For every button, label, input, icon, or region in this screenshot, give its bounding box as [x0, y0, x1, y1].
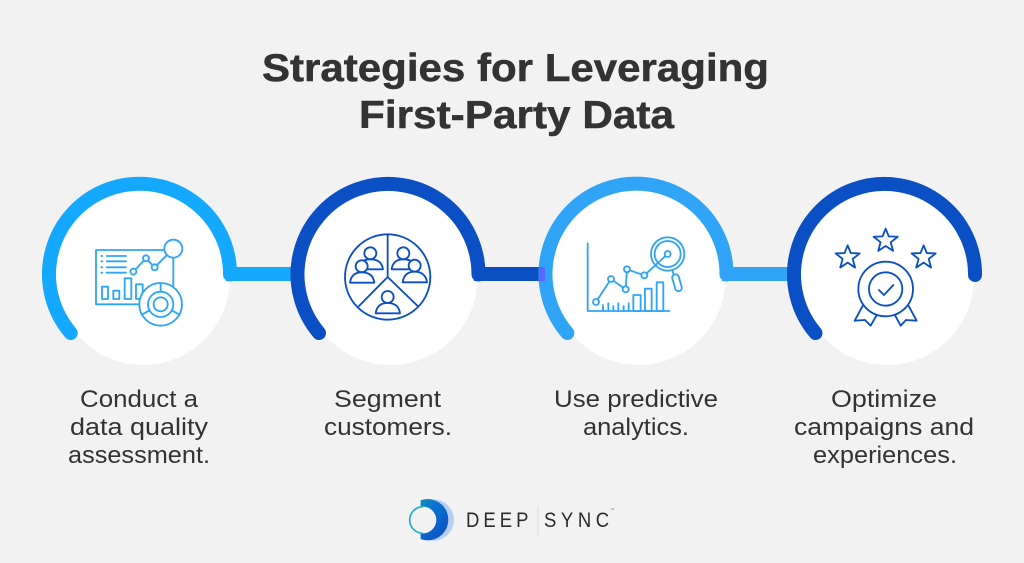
step 3 connector — [722, 267, 794, 281]
step 3 arc — [546, 184, 727, 333]
step 4 label: campaigns and — [794, 414, 974, 441]
step 2: segment customers — [298, 184, 546, 441]
step 3 label: Use predictive — [554, 386, 718, 413]
logo wordmark — [466, 507, 614, 532]
step 2 connector — [474, 267, 546, 281]
step 1 arc — [49, 184, 230, 333]
title — [262, 47, 769, 137]
step 2 label — [324, 386, 452, 441]
icon: predictive chart with magnifier — [588, 237, 684, 311]
logo wordmark: DEEP — [466, 509, 528, 532]
step 1: data quality assessment — [49, 184, 298, 469]
title: Strategies for Leveraging — [262, 47, 769, 90]
title: First-Party Data — [359, 94, 675, 137]
logo: Deep Sync — [407, 499, 614, 541]
step 4 label: experiences. — [813, 442, 957, 469]
logo wordmark: SYNC — [544, 509, 609, 532]
step 1 label — [68, 386, 210, 469]
step 4 arc — [794, 184, 975, 333]
step 3: predictive analytics — [539, 184, 794, 441]
step 1 connector — [226, 267, 298, 281]
step 3 label — [554, 386, 718, 441]
step 1 white disc — [56, 191, 230, 365]
step 4 label: Optimize — [831, 386, 937, 413]
step 3 label: analytics. — [583, 414, 689, 441]
icon: customer segments pie — [345, 234, 430, 320]
logo mark — [407, 499, 454, 541]
step 1 label: Conduct a — [80, 386, 199, 413]
step 3 white disc — [552, 191, 726, 365]
icon: award medal with stars — [836, 229, 936, 326]
step 4: optimize campaigns — [794, 184, 975, 469]
step 2 white disc — [304, 191, 478, 365]
logo wordmark: ™ — [610, 507, 614, 512]
step 4 label — [794, 386, 974, 469]
icon: dashboard report — [96, 240, 182, 326]
step 2 label: customers. — [324, 414, 452, 441]
step 1 label: assessment. — [68, 442, 210, 469]
step 1 label: data quality — [70, 414, 208, 441]
step 2 arc — [298, 184, 479, 333]
connector overlap patch — [539, 267, 545, 281]
step 4 white disc — [800, 191, 974, 365]
step 2 label: Segment — [334, 386, 441, 413]
